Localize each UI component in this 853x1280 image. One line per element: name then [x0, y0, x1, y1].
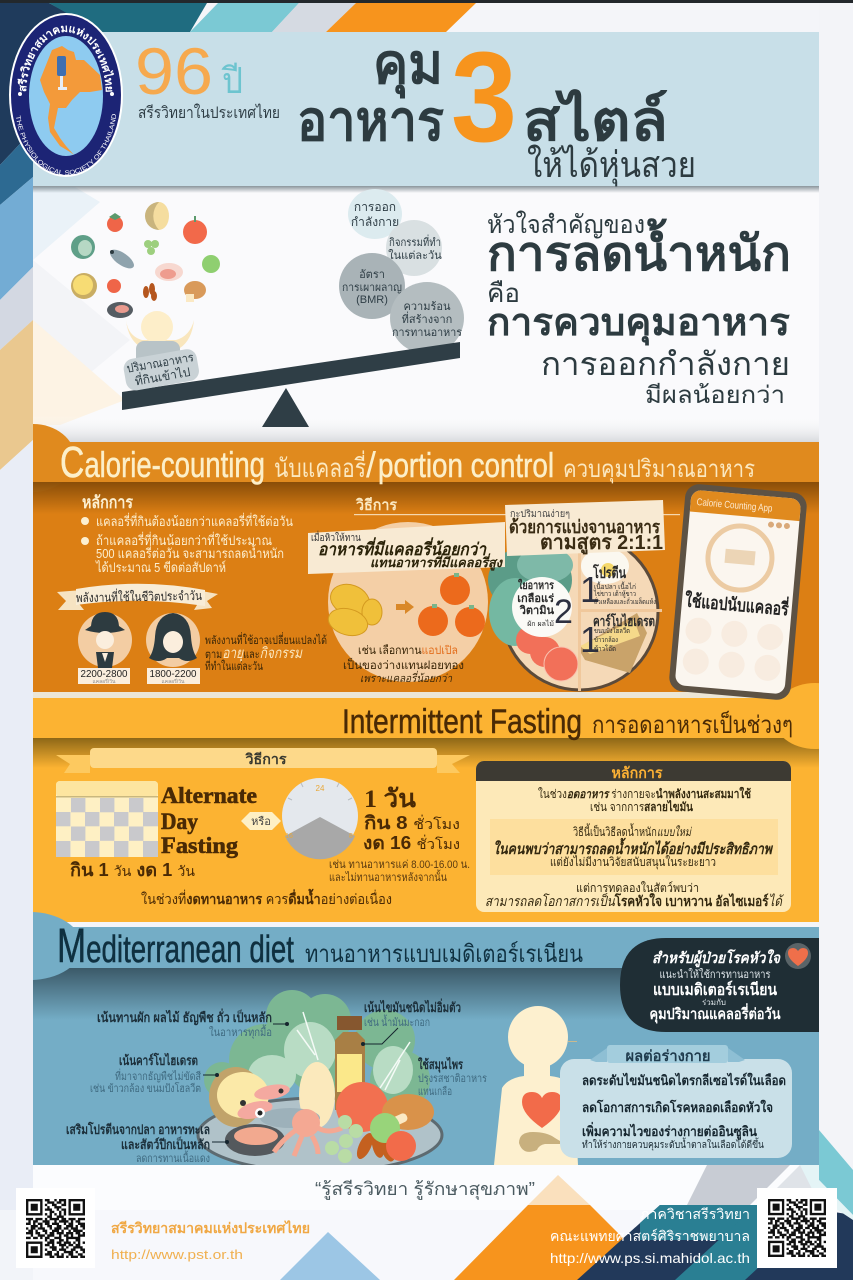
- section heading: [60, 438, 755, 487]
- icon: lettuce: [71, 235, 95, 259]
- 16:8 label: งด 16 ชั่วโมง: [363, 833, 460, 853]
- society contact: สรีรวิทยาสมาคมแห่งประเทศไทย: [111, 1219, 310, 1236]
- phone app: ใช้แอปนับแคลอรี่: [684, 587, 790, 619]
- main title: อาหาร: [297, 89, 444, 152]
- main title: ให้ได้หุ่นสวย: [527, 144, 696, 187]
- icon: fish: [107, 246, 137, 272]
- section heading: Mediterranean diet: [57, 920, 294, 973]
- callout: carbohydrates: เช่น ข้าวกล้อง ขนมปังโฮลวีต: [90, 1081, 201, 1095]
- energy note: ตามอายุและกิจกรรม: [205, 645, 303, 662]
- plate 2:1:1: 2: [554, 593, 573, 631]
- society logo: [9, 13, 123, 177]
- bread: [209, 1067, 269, 1127]
- callout: herbs: แทนเกลือ: [418, 1085, 452, 1098]
- section heading: Calorie-counting: [60, 438, 265, 487]
- card: effects on the body: เพิ่มความไวของร่างกายต่ออินซูลิน: [582, 1121, 758, 1140]
- callout: herbs: ปรุงรสชาติอาหาร: [418, 1073, 487, 1085]
- circle: exercise: การออก: [354, 200, 396, 214]
- calendar: [56, 781, 158, 857]
- callout: vegetables: เน้นทานผัก ผลไม้ ธัญพืช ถั่ว เป็นหลัก: [97, 1008, 272, 1026]
- hero statement: หัวใจสำคัญของ: [487, 210, 645, 239]
- callout: for heart patients: แบบเมดิเตอร์เรเนียน: [653, 980, 777, 999]
- icon: woman: [146, 613, 200, 667]
- section heading: การอดอาหารเป็นช่วงๆ: [592, 710, 793, 739]
- callout: for heart patients: ร่วมกับ: [702, 998, 726, 1007]
- callout: unsaturated fat: [361, 998, 461, 1046]
- callout: protein: [66, 1121, 229, 1165]
- subtitle: 96 years: 96: [135, 34, 213, 108]
- grapes: [325, 1115, 363, 1163]
- society contact: [111, 1219, 310, 1262]
- callout: unsaturated fat: เช่น น้ำมันมะกอก: [364, 1014, 430, 1029]
- pear: [299, 1062, 335, 1128]
- circle: thermic effect of food: ความร้อน: [404, 301, 451, 313]
- circle: daily activity: ในแต่ละวัน: [388, 249, 442, 262]
- principles card: เช่น จากการสลายไขมัน: [590, 799, 694, 814]
- clock: 8: [349, 833, 353, 840]
- main title: สไตล์: [523, 88, 668, 152]
- hero statement: มีผลน้อยกว่า: [645, 382, 785, 409]
- icon: apple: [183, 216, 207, 244]
- plate 2:1:1: ใยอาหาร: [518, 578, 554, 592]
- card: effects on the body: ผลต่อร่างกาย: [626, 1048, 710, 1065]
- section heading: /: [366, 444, 376, 485]
- vegetables: [488, 546, 578, 681]
- icon: tomato: [107, 279, 121, 293]
- callout: vegetables: [97, 1008, 289, 1039]
- energy box: men: แคลอรี่/วัน: [93, 678, 116, 685]
- plate 2:1:1: วิตามิน: [519, 604, 554, 617]
- QR code: society: [16, 1188, 95, 1268]
- principles card: สามารถลดโอกาสการเป็นโรคหัวใจ เบาหวาน อัลไซเมอร์ได้: [485, 892, 785, 909]
- or badge: [241, 812, 281, 830]
- principles card: ในคนพบว่าสามารถลดน้ำหนักได้อย่างมีประสิทธิภาพ: [493, 837, 774, 858]
- callout: vegetables: ในอาหารทุกมื้อ: [209, 1024, 272, 1039]
- society logo: THE PHYSIOLOGICAL SOCIETY OF THAILAND: [16, 114, 116, 175]
- ribbon: daily energy: [57, 584, 218, 610]
- alternate day fasting label: Alternate: [161, 783, 257, 808]
- circle: daily activity: [386, 220, 442, 276]
- callout: carbohydrates: [90, 1052, 219, 1095]
- section heading: ควบคุมปริมาณอาหาร: [563, 456, 755, 484]
- green tomato and tomato: [370, 1113, 416, 1161]
- callout: unsaturated fat: เน้นไขมันชนิดไม่อิ่มตัว: [364, 998, 461, 1015]
- circle: exercise: กำลังกาย: [351, 215, 399, 229]
- callout: for heart patients: แนะนำให้ใช้การทานอาหาร: [660, 968, 771, 981]
- card: effects on the body: ลดระดับไขมันชนิดไตรกลีเซอไรด์ในเลือด: [582, 1072, 786, 1088]
- plate 2:1:1: ถั่วเหลืองและถั่วเมล็ดแห้ง: [594, 597, 656, 606]
- greens: [204, 990, 430, 1110]
- principles: แคลอรี่ที่กินต้องน้อยกว่าแคลอรี่ที่ใช้ต่อวัน: [96, 513, 293, 529]
- principles card: แต่การทดลองในสัตว์พบว่า: [576, 881, 699, 895]
- beam: [122, 342, 460, 410]
- alternate day fasting label: Day: [161, 809, 198, 834]
- principles: 500 แคลอรี่ต่อวัน จะสามารถลดน้ำหนัก: [96, 544, 284, 561]
- principles card: หลักการ: [612, 765, 663, 782]
- energy box: men: [78, 668, 130, 685]
- callout: for heart patients: คุมปริมาณแคลอรี่ต่อวัน: [650, 1003, 781, 1024]
- section heading: นับแคลอรี่: [274, 450, 366, 483]
- plate 2:1:1: 1: [580, 619, 600, 660]
- department contact: ภาควิชาสรีรวิทยา: [640, 1206, 750, 1222]
- clock: 24: [316, 784, 325, 793]
- label: food intake: ปริมาณอาหาร: [125, 350, 195, 376]
- main title: 3: [451, 26, 517, 169]
- phone app: Calorie Counting App: [696, 497, 773, 515]
- arrow: [396, 600, 414, 614]
- icon: pancreas: [519, 1132, 565, 1152]
- icon: peas: [144, 240, 159, 255]
- callout: herbs: ใช้สมุนไพร: [418, 1056, 463, 1073]
- principles card: แต่ยังไม่มีงานวิจัยสนับสนุนในระยะยาว: [550, 855, 716, 870]
- callout: herbs: [418, 1056, 487, 1098]
- panel: calorie counting: [0, 424, 819, 692]
- or badge: หรือ: [251, 815, 271, 828]
- plate 2:1:1: ผัก ผลไม้: [527, 619, 554, 628]
- principles card: [476, 761, 791, 912]
- plate: [198, 1098, 442, 1172]
- section heading: Intermittent Fasting: [342, 703, 582, 741]
- principles card: วิธีนี้เป็นวิธีลดน้ำหนักแบบใหม่: [573, 823, 693, 839]
- mussel: [225, 1124, 285, 1156]
- snack swap circle: เป็นของว่างแทนฝอยทอง: [343, 657, 464, 672]
- body figure: [494, 1006, 578, 1165]
- footer shapes: [0, 1130, 853, 1280]
- alternate day fasting label: [70, 783, 257, 880]
- section heading: portion control: [378, 447, 554, 485]
- energy box: women: [147, 668, 200, 685]
- plate 2:1:1: ขนมปังโฮลวีต: [594, 626, 630, 635]
- callout: plate formula: กะปริมาณง่ายๆ: [510, 509, 570, 520]
- circle: thermic effect of food: ที่สร้างจาก: [402, 311, 452, 326]
- icon: almonds: [143, 283, 157, 301]
- energy box: women: แคลอรี่/วัน: [162, 678, 185, 685]
- icon: man: [78, 612, 132, 668]
- clock: 16: [285, 833, 293, 840]
- society logo: สรีรวิทยาสมาคมแห่งประเทศไทย: [18, 26, 114, 92]
- subtitle: 96 years: ปี: [221, 60, 243, 101]
- plate 2:1:1: 1: [580, 569, 600, 610]
- hero statement: การลดน้ำหนัก: [487, 218, 791, 281]
- 16:8 label: และไม่ทานอาหารหลังจากนั้น: [329, 869, 447, 884]
- phone app: [668, 483, 808, 701]
- ribbon: daily energy: พลังงานที่ใช้ในชีวิตประจำวัน: [76, 587, 202, 605]
- hero panel background: [33, 185, 819, 442]
- plate 2:1:1: โปรตีน: [592, 563, 627, 582]
- energy note: ที่ทำในแต่ละวัน: [205, 658, 263, 673]
- apple: [336, 1082, 388, 1132]
- callout: carbohydrates: ที่มาจากธัญพืชไม่ขัดสี: [115, 1068, 201, 1083]
- society contact: http://www.pst.or.th: [111, 1247, 243, 1262]
- panel: mediterranean diet: [0, 912, 819, 1172]
- icon: strawberry: [107, 213, 123, 232]
- hero statement: การควบคุมอาหาร: [487, 302, 791, 346]
- ribbon: method: วิธีการ: [244, 751, 287, 767]
- callout: protein: เสริมโปรตีนจากปลา อาหารทะเล: [66, 1121, 210, 1137]
- plate 2:1:1: [488, 534, 662, 691]
- circle: BMR: การเผาผลาญ: [342, 282, 402, 294]
- energy box: men: 2200-2800: [80, 668, 128, 680]
- subtitle: 96 years: [135, 34, 280, 122]
- callout: protein: และสัตว์ปีกเป็นหลัก: [121, 1135, 210, 1152]
- 16:8 label: กิน 8 ชั่วโมง: [364, 813, 460, 833]
- card: effects on the body: ลดโอกาสการเกิดโรคหลอดเลือดหัวใจ: [582, 1098, 773, 1115]
- hydration note: ในช่วงที่งดทานอาหาร ควรดื่มน้ำอย่างต่อเนื่อง: [141, 888, 392, 907]
- callout: plate formula: [505, 500, 665, 556]
- snack swap circle: เช่น เลือกทานแอปเปิล: [358, 644, 458, 657]
- snack swap circle: เพราะแคลอรี่น้อยกว่า: [360, 670, 453, 685]
- header band: [33, 26, 819, 193]
- slogan: “รู้สรีรวิทยา รู้รักษาสุขภาพ”: [315, 1179, 535, 1200]
- subtitle: 96 years: สรีรวิทยาในประเทศไทย: [138, 103, 280, 122]
- label: food intake: [122, 348, 201, 392]
- alternate day fasting label: Fasting: [161, 833, 239, 858]
- icon: mushroom: [184, 281, 206, 302]
- icon: heart: [522, 1092, 562, 1128]
- card: effects on the body: ทำให้ร่างกายควบคุมระดับน้ำตาลในเลือดได้ดีขึ้น: [582, 1137, 764, 1151]
- callout: for heart patients: [620, 938, 819, 1032]
- principles: [81, 493, 293, 575]
- circle: BMR: อัตรา: [359, 269, 385, 281]
- bottle of oil: [335, 1016, 365, 1110]
- almonds: [354, 1129, 398, 1163]
- department contact: คณะแพทยศาสตร์ศิริราชพยาบาล: [550, 1228, 750, 1244]
- hero statement: [487, 210, 791, 409]
- ribbon: method: [56, 748, 470, 773]
- icon: apples: [418, 573, 485, 637]
- egg and bread: [578, 548, 647, 673]
- food icons above the scale: [71, 202, 220, 318]
- principles: ได้ประมาณ 5 ขีดต่อสัปดาห์: [95, 560, 226, 575]
- department contact: http://www.ps.si.mahidol.ac.th: [550, 1250, 750, 1266]
- icon: mussel: [107, 302, 133, 318]
- callout: for heart patients: สำหรับผู้ป่วยโรคหัวใจ: [652, 948, 781, 968]
- circle: BMR: [339, 253, 405, 319]
- plate 2:1:1: ข้าวโอ๊ต: [594, 644, 616, 653]
- principles card: ในช่วงอดอาหาร ร่างกายจะนำพลังงานสะสมมาใช้: [538, 786, 751, 801]
- circle: thermic effect of food: การทานอาหาร: [392, 327, 462, 339]
- plate 2:1:1: ข้าวกล้อง: [594, 636, 618, 644]
- plate 2:1:1: เกลือแร่: [517, 592, 554, 605]
- person eating: [126, 311, 194, 375]
- shrimp: [236, 1082, 291, 1122]
- icon: pear: [145, 202, 169, 230]
- card: effects on the body: [560, 1045, 792, 1158]
- main title: คุม: [373, 32, 443, 99]
- snack swap circle: [325, 522, 488, 692]
- icon: coins: [325, 579, 382, 640]
- principles: หลักการ: [82, 493, 134, 512]
- circle: exercise: [348, 189, 402, 239]
- callout: choose lower calorie: อาหารที่มีแคลอรี่น้อยกว่า: [318, 537, 487, 559]
- callout: plate formula: ด้วยการแบ่งจานอาหาร: [509, 517, 660, 537]
- circle: BMR: (BMR): [356, 294, 388, 306]
- method heading: วิธีการ: [355, 496, 398, 514]
- callout: choose lower calorie: เมื่อหิวให้ทาน: [311, 530, 361, 544]
- icon: bread: [71, 273, 97, 299]
- plate 2:1:1: ไข่ขาว เต้าหู้ขาว: [593, 589, 636, 598]
- alternate day fasting label: กิน 1 วัน งด 1 วัน: [70, 860, 195, 880]
- main title: [297, 26, 696, 187]
- balance scale: [122, 189, 464, 427]
- hero statement: คือ: [487, 278, 520, 308]
- hero statement: การออกกำลังกาย: [541, 346, 790, 382]
- clock: [282, 778, 358, 859]
- plate 2:1:1: เนื้อปลา เนื้อไก่: [594, 580, 636, 591]
- icon: shrimp: [155, 263, 183, 281]
- section heading: ทานอาหารแบบเมดิเตอร์เรเนียน: [305, 940, 583, 968]
- principles: ถ้าแคลอรี่ที่กินน้อยกว่าที่ใช้ประมาณ: [96, 532, 272, 548]
- section heading: [57, 920, 583, 973]
- food illustration: [198, 990, 442, 1172]
- section heading: [342, 703, 793, 741]
- 16:8 label: 1 วัน: [364, 786, 416, 813]
- plate 2:1:1: คาร์โบไฮเดรต: [593, 612, 655, 629]
- callout: carbohydrates: เน้นคาร์โบไฮเดรต: [119, 1052, 198, 1068]
- 16:8 label: [329, 786, 470, 884]
- fish: [255, 1108, 320, 1128]
- callout: choose lower calorie: [308, 522, 505, 574]
- energy note: [205, 632, 327, 673]
- energy note: พลังงานที่ใช้อาจเปลี่ยนแปลงได้: [205, 632, 327, 647]
- callout: choose lower calorie: แทนอาหารที่มีแคลอรี่สูง: [370, 553, 504, 571]
- fulcrum: [262, 388, 309, 427]
- circle: thermic effect of food: [390, 282, 464, 354]
- callout: protein: ลดการทานเนื้อแดง: [136, 1150, 210, 1165]
- octopus: [274, 1109, 342, 1156]
- icon: green tomato: [202, 255, 220, 273]
- label: food intake: ที่กินเข้าไป: [133, 363, 191, 388]
- panel: intermittent fasting: [33, 683, 853, 922]
- QR code: department: [757, 1188, 837, 1268]
- 16:8 label: เช่น ทานอาหารแค่ 8.00-16.00 น.: [329, 859, 470, 871]
- mushroom: [378, 1094, 434, 1133]
- callout: plate formula: ตามสูตร 2:1:1: [540, 532, 663, 556]
- department contact: [550, 1206, 750, 1266]
- energy box: women: 1800-2200: [150, 668, 197, 680]
- circle: daily activity: กิจกรรมที่ทำ: [389, 234, 441, 249]
